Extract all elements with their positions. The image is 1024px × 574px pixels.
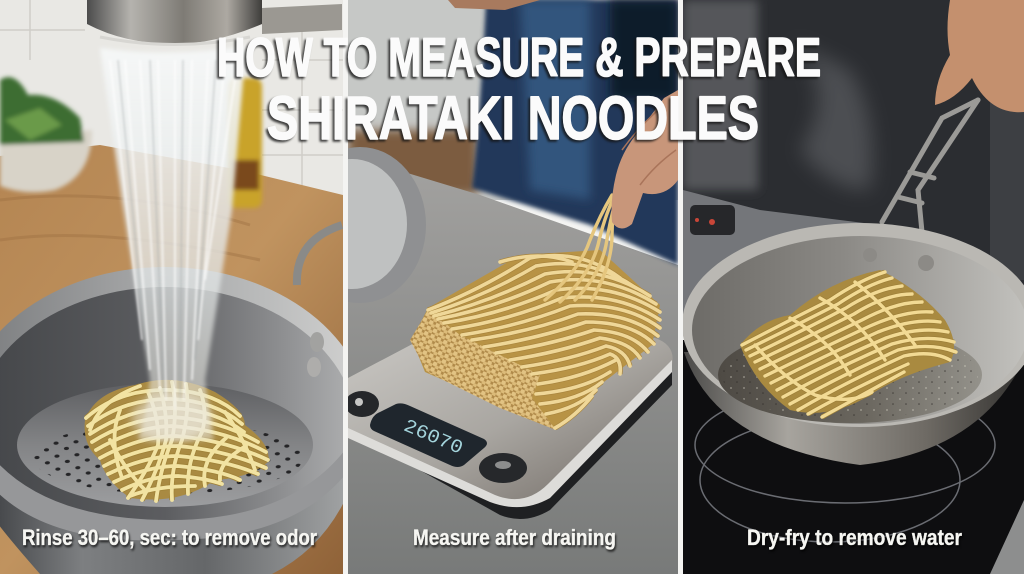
pan rim: [682, 223, 1024, 427]
pan rivets: [863, 248, 934, 271]
scale base shadow: [420, 372, 672, 519]
hand: [612, 90, 678, 229]
title line 2: SHIRATAKI NOODLES: [267, 84, 759, 152]
faucet head: [87, 0, 342, 44]
noodle pile: [740, 270, 956, 417]
scale buttons: [345, 391, 527, 483]
panel: rinse noodles: [0, 0, 370, 574]
captions: [22, 525, 962, 550]
title: [217, 26, 821, 152]
water stream: [100, 46, 246, 442]
scale display: 26070: [400, 415, 466, 459]
hand holding handle: [935, 0, 1024, 112]
caption: measure: Measure after draining: [413, 525, 616, 550]
caption: rinse: Rinse 30–60, sec: to remove odor: [22, 525, 317, 550]
noodle nest: [85, 380, 269, 501]
stove buttons: [690, 205, 735, 235]
scale display: [370, 403, 487, 467]
pot rim and interior: [0, 267, 343, 378]
counter wood: [0, 145, 343, 574]
caption: dry-fry: Dry-fry to remove water: [747, 525, 962, 550]
panel: dry-fry noodles: [682, 0, 1024, 574]
pan base: [718, 327, 982, 423]
strands lifted by hand: [545, 195, 617, 302]
cooktop: [683, 340, 1024, 574]
strainer basin: [17, 383, 313, 507]
silver plate: [348, 147, 426, 278]
pot handle: [297, 225, 342, 285]
dark kitchen background: [683, 0, 1024, 300]
pan handle: [882, 100, 978, 232]
scale: [348, 338, 673, 504]
counter: [348, 155, 678, 574]
panel: measure noodles: [348, 0, 678, 574]
blue apron: [472, 0, 678, 265]
pot front rim: [0, 452, 343, 540]
tile wall: [0, 0, 343, 200]
pan inner wall: [692, 236, 1024, 424]
cut noodle ends: [410, 310, 556, 430]
arm: [448, 0, 540, 10]
pan underside: [684, 345, 1024, 465]
icon: oil bottle: [228, 78, 262, 208]
icon: basil bowl: [0, 77, 92, 192]
stove top back: [683, 190, 864, 314]
noodle block: [410, 195, 660, 430]
pot outer body: [0, 475, 345, 574]
pot rivets: [307, 332, 324, 377]
blurred wall: [348, 0, 678, 200]
steam: [790, 40, 872, 190]
cooktop rings: [694, 410, 996, 543]
strainer holes: [34, 430, 300, 494]
